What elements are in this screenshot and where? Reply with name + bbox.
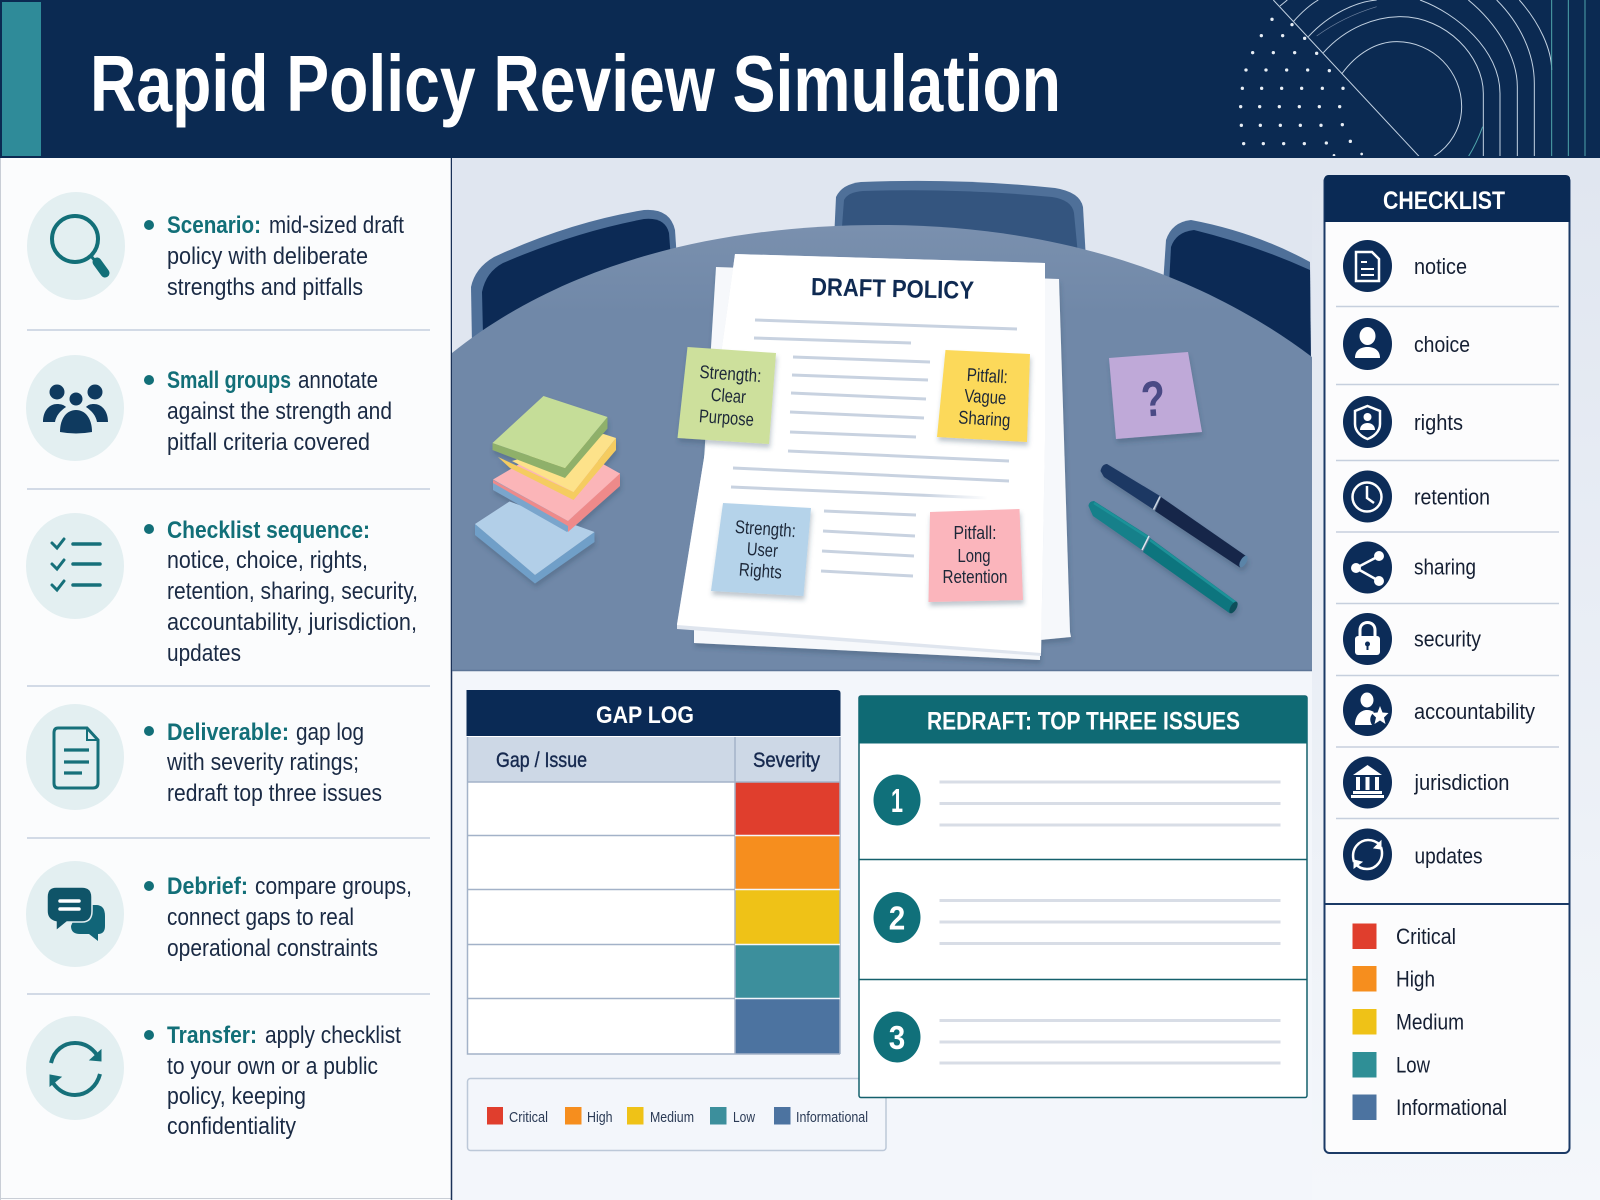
legend: severity key: Low: [1396, 1052, 1430, 1078]
legend: horizontal severity: High: [587, 1109, 612, 1126]
panel: gap log table: [466, 690, 840, 1054]
illustration: meeting table scene: [452, 158, 1312, 671]
item: security: [1343, 613, 1481, 665]
sticky note: pitfall vague sharing: [937, 350, 1030, 442]
chair: left: [471, 210, 677, 345]
step: checklist sequence: retention, sharing, security,: [167, 578, 418, 605]
sticky note: question mark: ?: [1139, 370, 1167, 428]
step: debrief: operational constraints: [167, 935, 378, 962]
heading: redraft: REDRAFT: TOP THREE ISSUES: [927, 708, 1240, 736]
table header row: Severity: [753, 749, 820, 772]
chair: right: [1163, 220, 1311, 370]
legend: horizontal severity: Low: [733, 1109, 755, 1126]
step: transfer: [26, 1016, 401, 1140]
legend: severity key: High: [1396, 966, 1435, 992]
sticky note: strength user rights: [711, 503, 811, 596]
pen: navy: [1100, 464, 1249, 569]
sticky note: pitfall long retention: [928, 509, 1023, 602]
step: small groups: against the strength and: [167, 398, 392, 425]
step: transfer: policy, keeping: [167, 1083, 306, 1110]
table top: [452, 225, 1312, 671]
item: retention: [1343, 470, 1490, 522]
legend: horizontal severity: Medium: [650, 1109, 694, 1126]
sticky note: strength user rights: User: [746, 538, 779, 561]
item: notice: notice: [1414, 254, 1467, 279]
severity colour cells: [735, 782, 840, 1054]
sticky note: pitfall long retention: Pitfall:: [954, 522, 996, 543]
item: notice: [1343, 240, 1467, 292]
step: scenario: [27, 192, 404, 301]
table header row: [467, 737, 840, 782]
step: transfer: Transfer:: [167, 1022, 257, 1049]
step: transfer: to your own or a public: [167, 1053, 378, 1080]
step: small groups: pitfall criteria covered: [167, 429, 370, 456]
sticky note: pitfall vague sharing: Pitfall:: [966, 364, 1008, 387]
item: accountability: [1343, 684, 1535, 736]
item: choice: choice: [1414, 332, 1470, 357]
icon: group of people: [43, 384, 108, 434]
header banner: [0, 0, 1600, 158]
step: small groups: [26, 355, 392, 461]
step: checklist sequence: [26, 513, 418, 667]
step: debrief: Debrief:: [167, 873, 248, 900]
legend: severity key: [1352, 924, 1507, 1120]
pen: teal: [1088, 501, 1239, 615]
item: security: security: [1414, 626, 1481, 652]
sticky note pad stack: [475, 396, 620, 584]
step: small groups: annotate: [298, 367, 378, 394]
panel: checklist: [1324, 175, 1570, 1153]
heading: draft policy: DRAFT POLICY: [811, 273, 975, 305]
sticky note: pitfall long retention: Retention: [942, 566, 1008, 587]
step: scenario: policy with deliberate: [167, 243, 368, 270]
step: debrief: [26, 861, 412, 967]
step: deliverable: [26, 704, 382, 810]
panel: left activity steps: [0, 158, 452, 1200]
item: rights: rights: [1414, 410, 1463, 435]
item: jurisdiction: jurisdiction: [1414, 770, 1510, 795]
step: checklist sequence: accountability, jurisdiction,: [167, 609, 417, 636]
sticky note: pitfall long retention: Long: [958, 545, 990, 566]
legend: severity key: Critical: [1396, 924, 1456, 949]
item: updates: updates: [1414, 844, 1482, 868]
issue 3: [874, 1012, 1280, 1063]
item: updates: [1343, 828, 1482, 880]
step: transfer: confidentiality: [167, 1113, 296, 1140]
legend: severity key: Informational: [1396, 1095, 1507, 1120]
issue 1: [874, 774, 1280, 826]
draft policy document: [677, 254, 1071, 660]
sticky note: strength user rights: Rights: [738, 559, 783, 582]
item: choice: [1343, 318, 1470, 370]
item: sharing: sharing: [1414, 554, 1476, 580]
icon: sync arrows: [50, 1043, 101, 1095]
item: sharing: [1343, 542, 1476, 594]
sticky note: strength user rights: Strength:: [734, 516, 797, 541]
sticky note: strength clear purpose: [678, 347, 776, 444]
icon: magnifying glass: [52, 216, 105, 273]
issue 3: 3: [889, 1019, 905, 1056]
step: checklist sequence: updates: [167, 640, 241, 667]
table header row: Gap / Issue: [496, 749, 587, 772]
step: small groups: Small groups: [167, 367, 291, 394]
step: scenario: strengths and pitfalls: [167, 274, 363, 301]
legend: horizontal severity: Informational: [796, 1109, 868, 1126]
item: jurisdiction: [1343, 756, 1510, 808]
item: retention: retention: [1414, 484, 1490, 510]
issue 1: 1: [891, 782, 903, 819]
legend: horizontal severity: [468, 1078, 886, 1150]
step: transfer: apply checklist: [265, 1022, 401, 1049]
sticky note: question mark: [1109, 352, 1202, 439]
sticky note: pitfall vague sharing: Sharing: [958, 406, 1011, 431]
step: debrief: connect gaps to real: [167, 904, 354, 931]
sticky note: pitfall vague sharing: Vague: [964, 385, 1007, 408]
step: scenario: mid-sized draft: [269, 212, 404, 239]
heading: gap log: GAP LOG: [596, 702, 694, 729]
step: deliverable: with severity ratings;: [166, 749, 359, 776]
issue 2: [874, 892, 1280, 944]
step: deliverable: Deliverable:: [167, 719, 289, 746]
step: scenario: Scenario:: [167, 212, 261, 239]
sticky note: strength clear purpose: Purpose: [698, 405, 755, 430]
legend: severity key: Medium: [1396, 1010, 1464, 1034]
step: checklist sequence: notice, choice, rights,: [167, 547, 368, 574]
issue 2: 2: [889, 900, 905, 936]
sticky note: strength clear purpose: Strength:: [699, 361, 762, 386]
heading: checklist: CHECKLIST: [1383, 187, 1505, 215]
icon: checklist: [52, 539, 100, 590]
icon: document: [54, 728, 98, 788]
sticky note: strength clear purpose: Clear: [710, 384, 747, 407]
item: accountability: accountability: [1414, 699, 1535, 724]
legend: horizontal severity: Critical: [509, 1109, 548, 1126]
panel: redraft top three issues: [858, 696, 1308, 1098]
item: rights: [1343, 396, 1463, 448]
title: Rapid Policy Review Simulation: [90, 39, 1061, 128]
chair: centre: [834, 181, 1086, 260]
icon: chat bubbles: [47, 887, 105, 941]
step: deliverable: gap log: [296, 719, 364, 746]
step: checklist sequence: Checklist sequence:: [167, 517, 370, 544]
step: debrief: compare groups,: [255, 873, 412, 900]
step: deliverable: redraft top three issues: [167, 780, 382, 807]
